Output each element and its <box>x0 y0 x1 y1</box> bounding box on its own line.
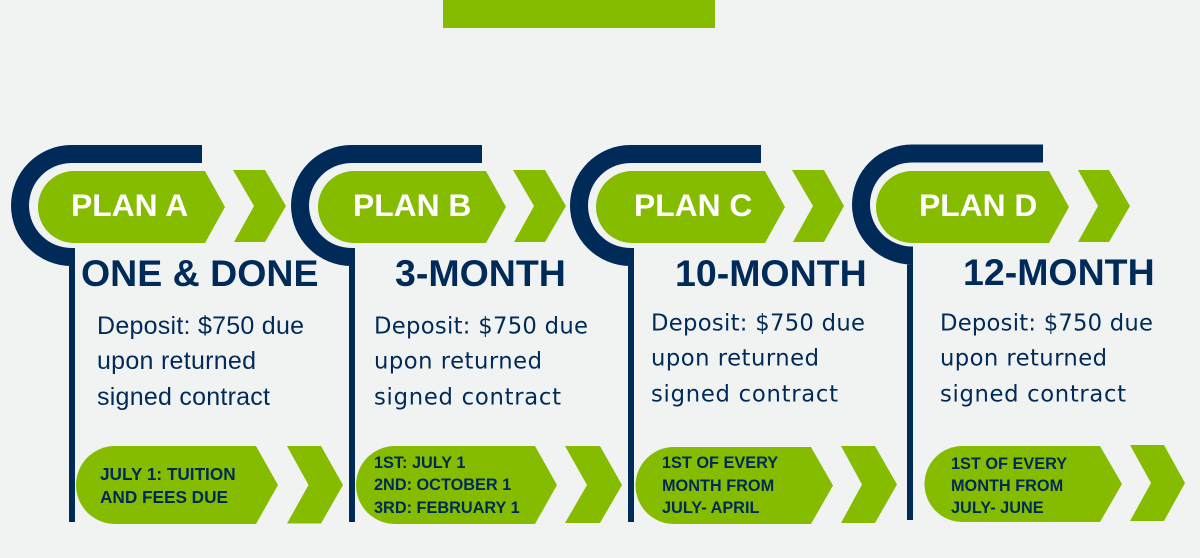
badge: plan C <box>596 171 785 243</box>
badge: plan B schedule: 2ND: OCTOBER 1 <box>374 476 511 494</box>
heading: 10-month: 10-MONTH <box>675 252 867 294</box>
text: plan A deposit: upon returned <box>97 347 256 375</box>
text: plan B deposit <box>374 314 588 410</box>
panel: plan B <box>291 145 622 524</box>
badge: plan D schedule: JULY- JUNE <box>951 499 1044 517</box>
badge: plan C schedule: MONTH FROM <box>662 477 774 495</box>
text: plan B deposit: signed contract <box>374 384 561 410</box>
panel: plan D <box>852 144 1185 522</box>
panel: plan A <box>11 145 343 524</box>
badge: plan C schedule: JULY- APRIL <box>662 499 759 517</box>
badge: plan B schedule: 1ST: JULY 1 <box>374 454 465 472</box>
badge: plan B schedule <box>356 446 557 524</box>
text: plan D deposit <box>940 310 1153 408</box>
arrow: plan D chevron <box>1078 170 1130 242</box>
arrow: plan B schedule chevron <box>565 446 622 523</box>
badge: plan B schedule: 3RD: FEBRUARY 1 <box>374 499 520 517</box>
panel: plan C <box>570 145 897 524</box>
text: plan D deposit: Deposit: $750 due <box>940 310 1153 336</box>
badge: plan D schedule <box>924 446 1122 522</box>
text: plan A deposit: signed contract <box>97 383 270 411</box>
bracket: plan B navy arc and line <box>291 145 482 522</box>
bracket: plan A navy arc and line <box>11 145 202 522</box>
badge: plan D schedule: 1ST OF EVERY <box>951 455 1067 473</box>
heading: 3-month: 3-MONTH <box>395 252 566 294</box>
text: plan B deposit: upon returned <box>374 348 542 374</box>
badge: plan D <box>876 171 1069 243</box>
arrow: plan A schedule chevron <box>287 446 343 524</box>
text: plan C deposit <box>651 310 865 408</box>
arrow: plan A chevron <box>233 170 286 242</box>
heading: one and done: ONE & DONE <box>81 252 319 294</box>
bracket: plan D navy arc and line <box>852 144 1043 520</box>
bracket: plan C navy arc and line <box>570 145 761 522</box>
badge: plan A schedule <box>76 446 278 524</box>
badge: plan A schedule: JULY 1: TUITION <box>100 464 236 484</box>
text: plan B deposit: Deposit: $750 due <box>374 314 588 340</box>
text: plan C deposit: signed contract <box>651 382 838 408</box>
heading: 12-month: 12-MONTH <box>963 251 1155 293</box>
badge: plan D schedule: MONTH FROM <box>951 477 1063 495</box>
badge: plan D: PLAN D <box>919 187 1037 223</box>
badge: plan C schedule: 1ST OF EVERY <box>662 454 778 472</box>
arrow: plan D schedule chevron <box>1130 445 1185 521</box>
badge: plan C: PLAN C <box>634 187 752 223</box>
arrow: plan B chevron <box>513 170 566 242</box>
text: plan D deposit: signed contract <box>940 382 1126 408</box>
badge: plan A <box>38 171 225 243</box>
badge: plan A: PLAN A <box>71 187 188 223</box>
arrow: plan C chevron <box>792 170 844 242</box>
arrow: plan C schedule chevron <box>841 446 897 523</box>
text: plan A deposit: Deposit: $750 due <box>97 312 304 340</box>
text: plan C deposit: upon returned <box>651 346 819 372</box>
top green title bar <box>443 0 715 28</box>
text: plan C deposit: Deposit: $750 due <box>651 310 865 336</box>
text: plan D deposit: upon returned <box>940 346 1107 372</box>
badge: plan A schedule: AND FEES DUE <box>100 487 228 507</box>
text: plan A deposit <box>97 312 304 411</box>
badge: plan B <box>318 171 506 243</box>
badge: plan B: PLAN B <box>353 187 471 223</box>
badge: plan C schedule <box>635 447 833 524</box>
